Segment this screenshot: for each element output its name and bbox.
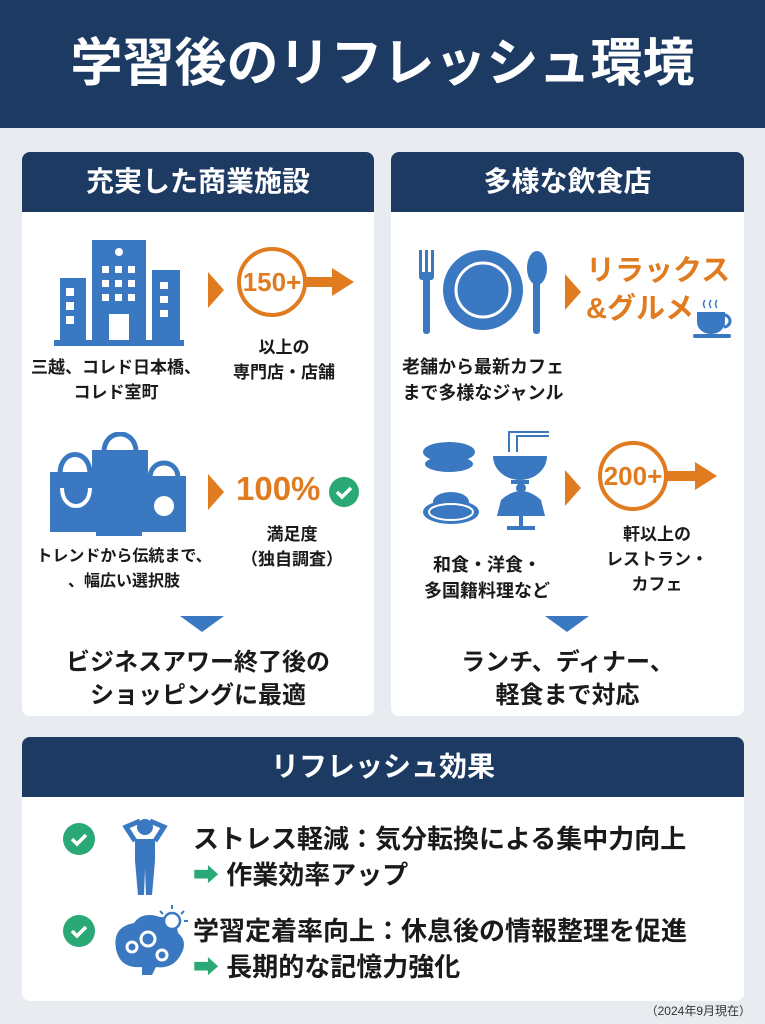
text: 学習定着率向上：休息後の情報整理を促進 bbox=[193, 916, 687, 946]
heading: 多様な飲食店 bbox=[483, 166, 652, 197]
text: trend: 、幅広い選択肢 bbox=[68, 573, 180, 590]
text: 200 label: カフェ bbox=[632, 575, 682, 594]
footnote: （2024年9月現在） bbox=[646, 1004, 751, 1018]
text: relax & gourmet: &グルメ bbox=[586, 293, 694, 325]
heading: リフレッシュ効果 bbox=[271, 751, 495, 782]
summary: ランチ、ディナー、 bbox=[461, 649, 674, 676]
icon: check bbox=[329, 477, 359, 507]
heading bbox=[391, 152, 744, 212]
panel: restaurants bbox=[391, 152, 744, 716]
text: trend: トレンドから伝統まで、 bbox=[36, 548, 212, 565]
text: 150 label bbox=[233, 338, 335, 382]
item: learning bbox=[63, 905, 687, 982]
text: genres bbox=[402, 357, 564, 403]
icon: relaxed person bbox=[122, 818, 168, 895]
stat 100%: 100% bbox=[236, 470, 320, 507]
text: stores bbox=[31, 358, 201, 402]
text: 150 label: 以上の bbox=[258, 338, 310, 357]
text: stores: 三越、コレド日本橋、 bbox=[31, 358, 201, 377]
text: cuisines: 和食・洋食・ bbox=[433, 555, 541, 575]
text: ➡ 作業効率アップ bbox=[193, 860, 408, 890]
text: 200 label: レストラン・ bbox=[606, 550, 708, 569]
icon: check bbox=[63, 823, 95, 855]
text: 150 label: 専門店・店舗 bbox=[233, 363, 335, 382]
icon: check bbox=[63, 915, 95, 947]
summary bbox=[461, 649, 674, 709]
text: trend bbox=[36, 547, 212, 590]
badge 200+: 200+ bbox=[604, 461, 662, 491]
text: satisfaction: 満足度 bbox=[266, 525, 318, 544]
text: satisfaction bbox=[241, 525, 343, 569]
text: ➡ 長期的な記憶力強化 bbox=[193, 952, 460, 982]
text: satisfaction: （独自調査） bbox=[241, 550, 343, 569]
icon: buildings bbox=[54, 240, 184, 346]
icon: plate and cutlery bbox=[419, 250, 547, 334]
text: genres: まで多様なジャンル bbox=[402, 383, 564, 403]
arrow 1 bbox=[208, 272, 224, 308]
badge 150+: 150+ bbox=[243, 267, 301, 297]
summary: ビジネスアワー終了後の bbox=[66, 649, 330, 676]
text: relax & gourmet bbox=[586, 255, 730, 325]
text: cuisines bbox=[424, 555, 550, 601]
summary bbox=[66, 649, 330, 709]
text: 200 label bbox=[606, 525, 708, 594]
summary: 軽食まで対応 bbox=[496, 682, 640, 709]
text: genres: 老舗から最新カフェ bbox=[402, 357, 564, 377]
panel: refresh effects bbox=[22, 737, 744, 1001]
text: 200 label: 軒以上の bbox=[623, 525, 691, 544]
text bbox=[193, 824, 686, 890]
icon: brain bbox=[115, 905, 188, 975]
heading: 充実した商業施設 bbox=[86, 166, 310, 197]
text: relax & gourmet: リラックス bbox=[586, 255, 730, 287]
title banner: 学習後のリフレッシュ環境 bbox=[70, 35, 694, 93]
heading bbox=[22, 737, 744, 797]
item: stress bbox=[63, 818, 686, 895]
panel: commercial facilities bbox=[22, 152, 374, 716]
badge 200+ bbox=[598, 441, 717, 511]
arrow bbox=[565, 274, 581, 310]
badge 150+ bbox=[237, 247, 354, 317]
text: stores: コレド室町 bbox=[74, 383, 158, 402]
heading bbox=[22, 152, 374, 212]
icon: shopping bags bbox=[50, 432, 186, 536]
text: ストレス軽減：気分転換による集中力向上 bbox=[193, 824, 686, 854]
icon: food dishes bbox=[423, 431, 549, 530]
arrow 2 bbox=[208, 474, 224, 510]
arrow bbox=[565, 470, 581, 506]
icon: coffee cup bbox=[693, 300, 732, 338]
text: cuisines: 多国籍料理など bbox=[424, 581, 550, 601]
title banner bbox=[0, 0, 765, 128]
down arrow bbox=[545, 616, 589, 632]
summary: ショッピングに最適 bbox=[90, 682, 306, 709]
down arrow bbox=[180, 616, 224, 632]
text bbox=[193, 916, 687, 982]
